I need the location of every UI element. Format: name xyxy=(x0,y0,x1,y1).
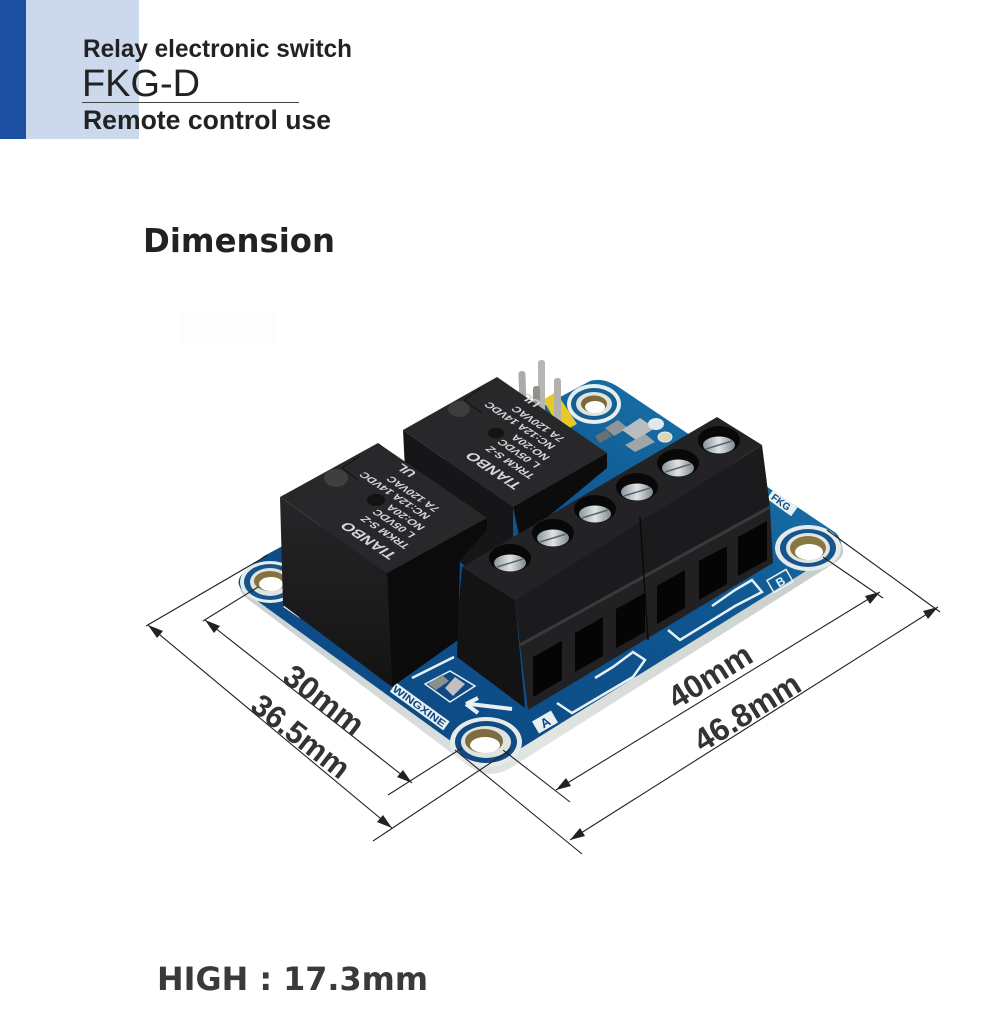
terminal block xyxy=(457,417,773,710)
relay markings: TRKM S-Z xyxy=(358,514,413,550)
30mm line xyxy=(205,620,412,783)
screw 5 xyxy=(657,449,699,477)
relay markings: TRKM S-Z xyxy=(483,444,538,480)
light blue band xyxy=(26,0,139,139)
relay markings: UL xyxy=(517,392,545,409)
faint box xyxy=(181,311,275,344)
silkscreen traces xyxy=(284,580,762,713)
label B: B xyxy=(773,573,788,590)
relay module photo xyxy=(238,360,843,774)
block lip xyxy=(520,507,770,645)
screw 3 xyxy=(574,495,616,523)
header line: product type: Relay electronic switch xyxy=(83,35,352,63)
mounting hole left xyxy=(240,561,300,603)
relay markings: UL xyxy=(392,462,420,479)
wire holes xyxy=(533,521,767,697)
mounting hole right xyxy=(775,525,841,571)
relay markings: L 05VDC xyxy=(495,437,544,469)
screw 1 xyxy=(489,544,531,572)
blue band xyxy=(0,0,26,139)
front relay xyxy=(280,443,487,687)
screw 4 xyxy=(616,473,658,501)
screw 6 xyxy=(698,426,740,454)
dimension arrowheads xyxy=(148,592,938,840)
board edge xyxy=(240,535,843,774)
board marking WINGXINE xyxy=(389,683,450,731)
relay markings: 7A 120VAC xyxy=(509,404,568,443)
relay markings: TIANBO xyxy=(462,449,526,491)
block seam xyxy=(640,517,648,640)
mounting hole top xyxy=(567,384,621,424)
relay markings xyxy=(304,455,477,561)
relay markings: TIANBO xyxy=(337,519,401,561)
header rule xyxy=(82,102,299,103)
label A xyxy=(532,710,559,734)
dimension lines xyxy=(146,530,940,854)
relay markings: NC:12A 14VDC xyxy=(482,400,559,450)
relay markings: L 05VDC xyxy=(370,507,419,539)
relay markings: NO:20A xyxy=(384,503,428,531)
pin header xyxy=(518,360,577,432)
relay markings: NC:12A 14VDC xyxy=(357,470,434,520)
header line: model: FKG-D xyxy=(82,63,200,105)
rear relay xyxy=(403,377,607,570)
header line: usage: Remote control use xyxy=(83,105,331,135)
screw 2 xyxy=(532,519,574,547)
40mm line xyxy=(556,592,880,790)
block sloped face xyxy=(515,445,770,645)
label 40mm: 40mm xyxy=(661,636,759,716)
block top xyxy=(462,417,762,600)
header banner xyxy=(0,0,352,139)
label 36.5mm: 36.5mm xyxy=(244,687,357,786)
height note: HIGH : 17.3mm xyxy=(157,960,428,998)
block front xyxy=(520,507,773,710)
extension lines xyxy=(146,530,940,854)
circuit board xyxy=(238,380,843,774)
board marking FKG: FKG xyxy=(769,492,792,514)
mounting hole bottom xyxy=(450,717,522,767)
heading: Dimension: Dimension xyxy=(143,221,335,260)
components: LED and resistor bottom xyxy=(425,671,475,702)
relay markings xyxy=(429,385,602,491)
block side xyxy=(457,567,525,708)
36.5mm line xyxy=(148,625,392,828)
components: top right xyxy=(595,418,672,452)
relay markings: 7A 120VAC xyxy=(384,474,443,513)
label A: A xyxy=(537,713,554,731)
board marking FKG xyxy=(766,490,798,517)
label B xyxy=(767,569,794,593)
board marking WINGXINE: WINGXINE xyxy=(390,684,448,730)
label 30mm: 30mm xyxy=(276,657,372,743)
46.8mm line xyxy=(570,607,938,840)
label 46.8mm: 46.8mm xyxy=(687,665,807,759)
relay markings: NO:20A xyxy=(509,433,553,461)
board surface xyxy=(238,380,841,761)
